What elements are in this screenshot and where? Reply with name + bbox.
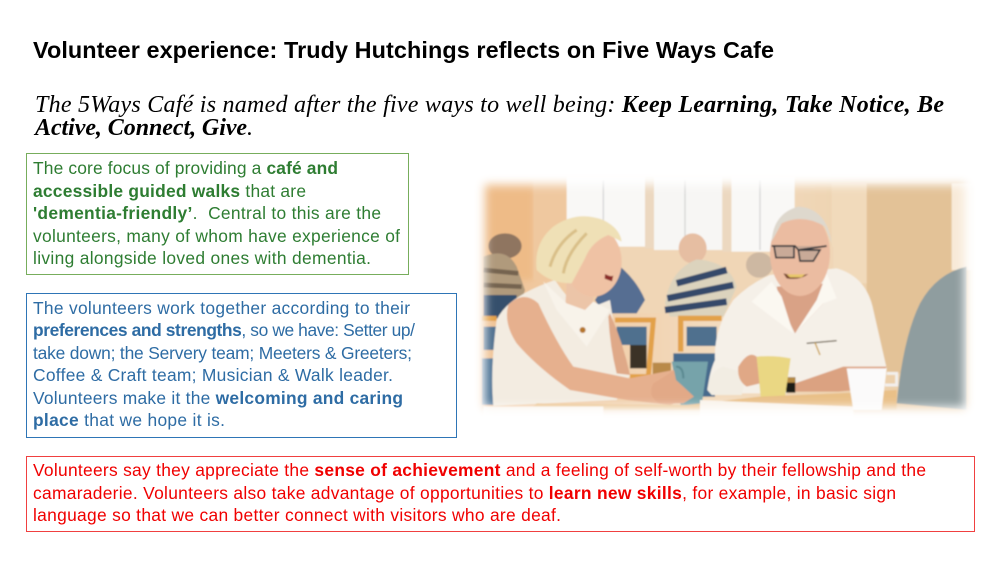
panel: cafe and guided walks: 'dementia-friendly’. Central to this are the (33, 203, 381, 223)
title: Volunteer experience: Trudy Hutchings reflects on Five Ways Cafe (33, 37, 774, 63)
teal mug (672, 362, 708, 405)
panel: cafe and guided walks: volunteers, many of whom have experience of (33, 226, 400, 246)
table (530, 390, 897, 410)
panel: volunteer roles: place that we hope it is. (33, 410, 225, 430)
panel: volunteer roles: Coffee & Craft team; Musician & Walk leader. (33, 365, 393, 385)
panel: volunteer roles (26, 294, 456, 438)
panel: volunteer roles: take down; the Servery team; Meeters & Greeters; (33, 343, 412, 363)
panel: what volunteers appreciate: language so that we can better connect with visitors who are deaf. (33, 505, 561, 525)
subtitle: five ways to well being: Active, Connect, Give. (33, 115, 253, 141)
foreground person (897, 267, 967, 410)
panel: cafe and guided walks: The core focus of providing a café and (33, 158, 338, 178)
panel: what volunteers appreciate: Volunteers say they appreciate the sense of achievement and a feeling of self-worth by their fellowship and the (33, 460, 926, 480)
windows (567, 177, 645, 247)
panel: volunteer roles: preferences and strengths, so we have: Setter up/ (33, 320, 415, 340)
subtitle: five ways to well being (33, 92, 944, 141)
woman (492, 280, 630, 406)
chairs (482, 318, 653, 377)
white cup (847, 368, 887, 410)
photo: two older volunteers laughing at a cafe table (470, 170, 980, 420)
yellow mug (757, 356, 791, 398)
background people (488, 233, 522, 259)
panel: volunteer roles: The volunteers work together according to their (33, 298, 410, 318)
panel: cafe and guided walks: living alongside loved ones with dementia. (33, 248, 371, 268)
subtitle: five ways to well being: The 5Ways Café is named after the five ways to well being: Keep Learning, Take Notice, Be (35, 92, 944, 118)
panel: cafe and guided walks (26, 154, 408, 274)
panel: volunteer roles: Volunteers make it the welcoming and caring (33, 388, 403, 408)
panel: what volunteers appreciate (26, 456, 974, 532)
panel: cafe and guided walks: accessible guided walks that are (33, 181, 306, 201)
panel: what volunteers appreciate: camaraderie. Volunteers also take advantage of opportunities to learn new skills, for example, in basic sign (33, 483, 896, 503)
man (707, 268, 887, 393)
